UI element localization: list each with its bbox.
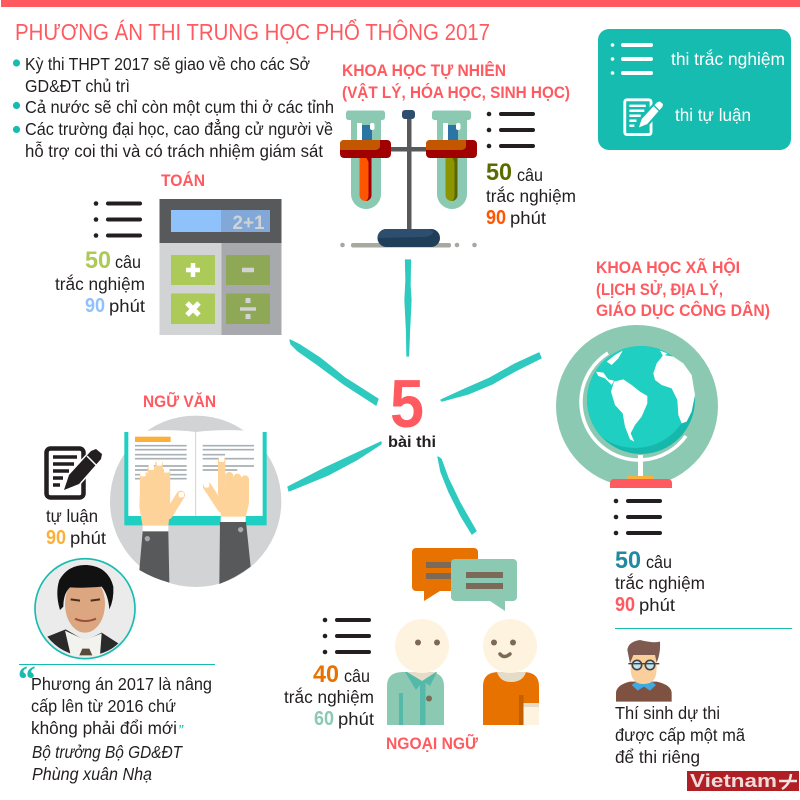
icon: person in green shirt (387, 619, 449, 725)
quote: ” (178, 722, 184, 739)
stats: maths: câu (115, 252, 141, 272)
stats: literature: tự luận (46, 506, 98, 526)
heading: social sciences (596, 257, 770, 320)
stats: literature (46, 506, 106, 549)
quote: không phải đổi mới (31, 718, 177, 738)
student note: để thi riêng (615, 747, 700, 767)
heading: literature: NGỮ VĂN (143, 391, 216, 411)
icon: calculator: 2+1 (232, 213, 265, 234)
stats: foreign language: phút (338, 709, 374, 729)
stats: social sciences: 50 (615, 547, 641, 574)
icon: pencil and paper (46, 448, 102, 498)
top bar (1, 0, 800, 7)
heading: natural sciences: KHOA HỌC TỰ NHIÊN (342, 61, 506, 80)
stats: maths: 90 (85, 295, 105, 317)
legend text: multiple choice: thi trắc nghiệm (671, 48, 785, 69)
stats: maths (55, 247, 145, 317)
quote: Phùng xuân Nhạ (32, 764, 152, 784)
divider above student note (615, 628, 792, 629)
section: Foreign language (284, 548, 539, 753)
stats: natural sciences: trắc nghiệm (486, 185, 576, 206)
icon: student with glasses (616, 640, 672, 702)
icon: multiple-choice list (487, 112, 533, 148)
stats: social sciences: 90 (615, 594, 635, 616)
centre label: 5 exams: bài thi (388, 434, 436, 451)
icon: white pencil and paper (625, 100, 664, 135)
stats: literature: phút (70, 528, 106, 548)
intro bullet list: hỗ trợ coi thi và có trách nhiệm giám sát (25, 140, 323, 161)
logo: Vietnam+ (687, 771, 799, 791)
intro bullet list: Các trường đại học, cao đẳng cử người về (25, 118, 333, 139)
icon: person in orange shirt (483, 619, 539, 725)
quote: Phương án 2017 là nâng (31, 674, 212, 694)
icon: multiple-choice list (94, 201, 140, 238)
centre label: 5 exams: 5 (390, 366, 424, 442)
section: Social sciences (556, 257, 770, 616)
heading: natural sciences (342, 61, 570, 102)
heading: social sciences: GIÁO DỤC CÔNG DÂN) (596, 301, 770, 320)
stats: social sciences: phút (639, 595, 675, 615)
icon: globe (556, 325, 718, 488)
quote (16, 659, 212, 784)
stats: natural sciences: phút (510, 208, 546, 228)
section: Maths (55, 171, 282, 335)
icon: white list (611, 43, 651, 75)
heading: social sciences: KHOA HỌC XÃ HỘI (596, 257, 740, 277)
stats: social sciences (615, 547, 705, 616)
intro bullet list (13, 54, 334, 161)
stats: natural sciences: 50 (486, 159, 512, 186)
heading: social sciences: (LỊCH SỬ, ĐỊA LÝ, (596, 280, 723, 299)
heading: maths: TOÁN (161, 171, 205, 190)
quote: cấp lên từ 2016 chứ (31, 696, 176, 716)
stats: social sciences: câu (646, 552, 672, 572)
stats: maths: trắc nghiệm (55, 273, 145, 294)
student note (615, 703, 745, 767)
legend panel (598, 29, 791, 150)
icon: multiple-choice list (614, 499, 660, 535)
icon: open book and hands (110, 416, 281, 587)
stats: social sciences: trắc nghiệm (615, 572, 705, 593)
intro bullet list: Cả nước sẽ chỉ còn một cụm thi ở các tỉnh (25, 97, 334, 117)
stats: foreign language: 60 (314, 708, 334, 730)
icon: test tubes on a stand (340, 110, 477, 248)
stats: foreign language: trắc nghiệm (284, 686, 374, 707)
icon: calculator (160, 199, 282, 335)
stats: natural sciences: 90 (486, 207, 506, 229)
logo: Vietnam+: Vietnam (690, 771, 777, 791)
portrait: minister (35, 559, 135, 659)
student note: được cấp một mã (615, 725, 745, 745)
heading: foreign language: NGOẠI NGỮ (386, 733, 478, 753)
section: Literature (46, 391, 281, 587)
stats: foreign language: 40 (313, 661, 339, 688)
radiating brush strokes (288, 260, 541, 534)
legend text: essay: thi tự luận (675, 105, 751, 125)
icon: multiple-choice list (323, 618, 369, 654)
stats: maths: phút (109, 296, 145, 316)
icon: speech bubbles (412, 548, 517, 611)
intro bullet list: GD&ĐT chủ trì (25, 76, 130, 96)
stats: natural sciences: câu (517, 165, 543, 185)
divider above quote (19, 664, 215, 665)
stats: maths: 50 (85, 247, 111, 274)
stats: foreign language (284, 661, 374, 730)
title: PHƯƠNG ÁN THI TRUNG HỌC PHỔ THÔNG 2017 (15, 18, 490, 45)
section: Natural sciences (340, 61, 576, 248)
stats: natural sciences (486, 159, 576, 229)
stats: foreign language: câu (344, 666, 370, 686)
intro bullet list: Kỳ thi THPT 2017 sẽ giao về cho các Sở (25, 54, 310, 74)
quote: Bộ trưởng Bộ GD&ĐT (32, 742, 183, 762)
stats: literature: 90 (46, 527, 66, 549)
quote: “ (16, 659, 35, 701)
heading: natural sciences: (VẬT LÝ, HÓA HỌC, SINH HỌC) (342, 83, 570, 102)
student note: Thí sinh dự thi (615, 703, 720, 723)
